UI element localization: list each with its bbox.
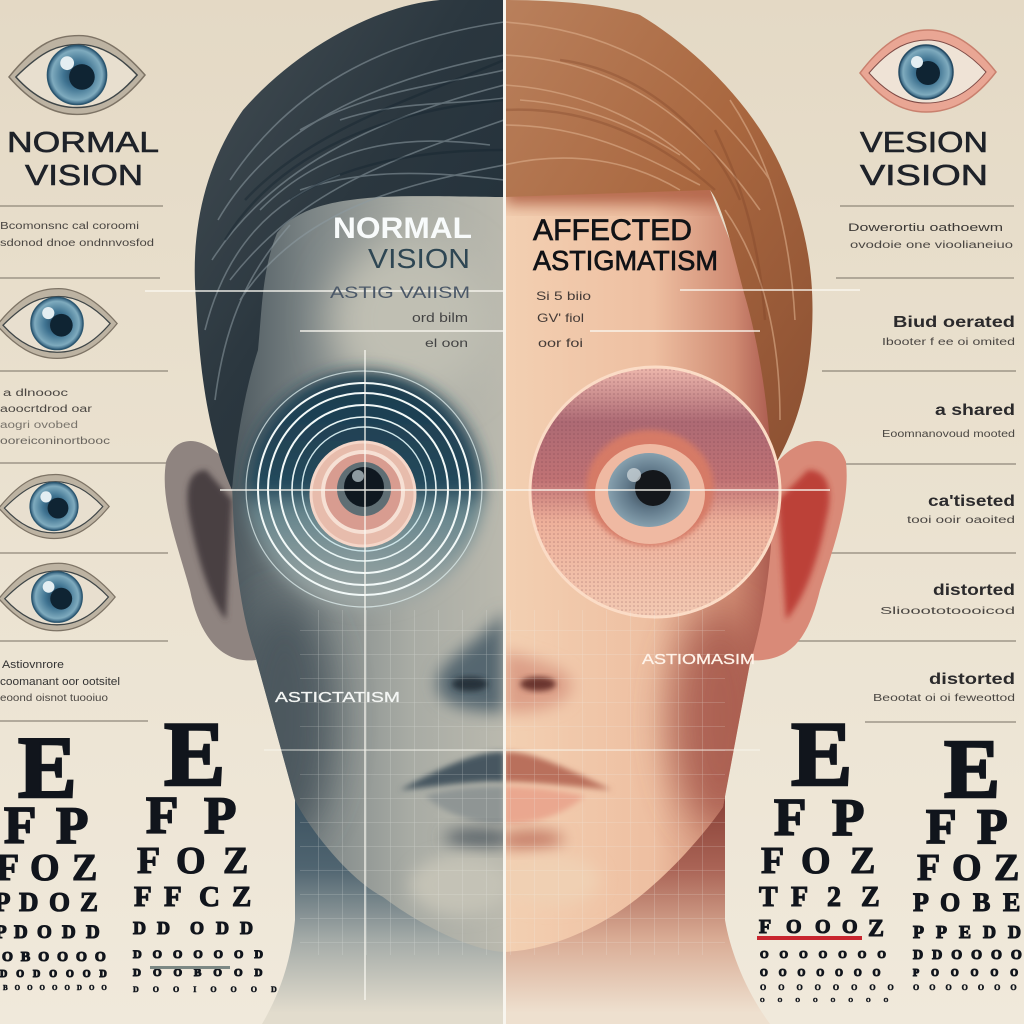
chart: eye chart 2: D (216, 918, 229, 938)
left forehead light (330, 240, 490, 400)
heading: normal vision left: NORMAL (7, 127, 159, 159)
icon: eye 3 (0, 474, 109, 538)
chart: eye chart 3: P (832, 789, 864, 847)
right vision disc (530, 367, 780, 617)
panel: right column affected (790, 30, 1016, 722)
chart: eye chart 4: E (944, 723, 1000, 816)
text block: blurred oerated: Ibooter f ee oi omited (882, 337, 1015, 348)
chart: eye chart 2: E (164, 703, 225, 805)
chart: eye chart 1: D (86, 922, 100, 943)
chart: eye chart 1: P (56, 797, 88, 855)
left lips (400, 752, 516, 915)
chart: eye chart 3: OOOOOOO (760, 968, 891, 979)
right hair (504, 0, 813, 470)
divider and text block 1: Bcomonsnc cal coroomi (0, 221, 139, 232)
text block: blurred oerated (822, 314, 1016, 371)
chart: eye chart 3: F (761, 840, 784, 882)
heading: normal vision center (333, 212, 472, 274)
text block: a shared (815, 402, 1016, 464)
chart: eye chart 2: DOOIOOOD (133, 985, 291, 994)
text block 2: a dlnoooc (3, 388, 68, 399)
right face shape (506, 190, 772, 952)
chart: eye chart 1: DODOOOD (0, 969, 116, 980)
text block: center affected: oor foi (538, 336, 583, 350)
chart: eye chart 1: O (30, 847, 60, 889)
heading: affected astigmatism (533, 214, 718, 276)
text block: distorted 1 (790, 582, 1016, 641)
overlay: scan lines (145, 290, 860, 1000)
text block: distorted 1: distorted (933, 582, 1015, 599)
chart: eye chart 4: Z (994, 847, 1019, 889)
text block: blurred oerated: Biud oerated (893, 314, 1015, 331)
divider and text block 1: sdonod dnoe ondnnvosfod (0, 238, 154, 249)
text block: right 1: ovodoie one vioolianeiuo (850, 240, 1014, 251)
text block 2 (0, 371, 168, 463)
chart: eye chart 4: O (940, 888, 960, 917)
highlight: red line (757, 936, 862, 940)
text block 3: coomanant oor ootsitel (0, 676, 120, 688)
label: astigmatism right: ASTIOMASIM (642, 651, 755, 668)
chart: eye chart 2: F (164, 881, 182, 913)
text block: center astigmatism left: ASTIG VAIISM (330, 283, 470, 302)
text block: cat tiseted: tooi ooir oaoited (907, 515, 1015, 526)
right eye iris (608, 453, 690, 527)
text block: distorted 2: distorted (929, 671, 1015, 688)
text block: center astigmatism left (330, 283, 470, 350)
text block: distorted 2: Beootat oi oi feweottod (873, 693, 1015, 704)
text block: distorted 1: Sliooototoooicod (880, 606, 1015, 617)
chart: eye chart 2: DOOBOOD (133, 967, 274, 979)
chart: eye chart 3: Z (868, 916, 884, 942)
chart: eye chart 2: C (199, 881, 220, 913)
chart: eye chart 2: DOOOOOD (133, 947, 274, 961)
chart: eye chart 2 (133, 703, 291, 994)
chart: eye chart 1: F (4, 797, 36, 855)
chart: eye chart 1: Z (80, 887, 98, 917)
text block: center astigmatism left: ord bilm (412, 310, 468, 325)
chart: eye chart 2: F (137, 840, 160, 882)
chart: left vision rings (246, 371, 482, 607)
text block: center affected: Si 5 biio (536, 289, 591, 303)
text block: center affected: GV' fiol (537, 311, 584, 325)
right forehead shadow (504, 180, 734, 204)
chart: eye chart 3: O (801, 840, 831, 882)
left nose shadow (437, 610, 504, 712)
chart: eye chart 2: D (240, 918, 253, 938)
chart: eye chart 1: Z (72, 847, 97, 889)
chart: eye chart 1: O (37, 922, 52, 943)
chart: eye chart 2: D (157, 918, 170, 938)
panel: left column normal vision (0, 36, 168, 721)
chart: eye chart 4: O (952, 847, 982, 889)
text block: right 1: Dowerortiu oathoewm (848, 222, 1003, 234)
chart: eye chart 3: 2 (827, 882, 841, 913)
chart: eye chart 2: Z (232, 881, 251, 913)
chart: eye chart 1: E (18, 720, 77, 817)
chart: eye chart 4: F (917, 847, 940, 889)
chart: eye chart 3: Z (850, 840, 875, 882)
heading: affected astigmatism: ASTIGMATISM (533, 245, 718, 276)
left neck (262, 780, 504, 1024)
chart: eye chart 3: OOOOOOOO (760, 983, 906, 992)
chart: eye chart 2: Z (223, 840, 248, 882)
chart: eye chart 3: OOOOOOOO (760, 998, 901, 1004)
icon: top left eye (9, 36, 145, 114)
text block: right 1 (836, 206, 1014, 278)
text block 3: eoond oisnot tuooiuo (0, 693, 109, 704)
chart: eye chart 4 (913, 723, 1024, 992)
chart: eye chart 4: P (977, 798, 1008, 854)
icon: eye 4 (0, 563, 115, 631)
chart: eye chart 3 (759, 703, 906, 1004)
chart: eye chart 1 (0, 720, 116, 992)
chart: eye chart 2: F (146, 787, 178, 845)
chart: eye chart 3: O (815, 916, 831, 938)
chart: eye chart 4: P (913, 888, 929, 917)
panel: right half of face (496, 0, 847, 1024)
heading: vision right (860, 127, 988, 192)
chart: eye chart 1: O (49, 887, 70, 917)
heading: normal vision left (7, 127, 159, 192)
left cheek shade (235, 600, 335, 840)
right lips (506, 748, 610, 894)
heading: vision right: VISION (860, 160, 988, 192)
chart: eye chart 2: D (133, 918, 146, 938)
text block 2: aoocrtdrod oar (0, 404, 93, 415)
chart: eye chart 3: O (842, 916, 858, 938)
label: astictatism left: ASTICTATISM (275, 689, 400, 706)
right neck (504, 780, 770, 1024)
chart: eye chart 1: OBOOOO (2, 950, 114, 965)
chart: eye chart 3: T (759, 882, 778, 913)
overlay: lower face grid (300, 610, 725, 955)
right ear (745, 441, 847, 660)
icon: eye 2 (0, 289, 117, 358)
chart: eye chart 1: D (14, 922, 28, 943)
text block 2: ooreiconinortbooc (0, 436, 110, 447)
heading: normal vision left: VISION (25, 160, 143, 192)
divider and text block 1 (0, 206, 163, 278)
chart: eye chart 2: F (134, 881, 152, 913)
right nose shadow (504, 650, 572, 712)
chart: eye chart 3: OOOOOOO (760, 949, 897, 961)
left eye dark band (247, 371, 483, 607)
chart: eye chart 1: D (19, 887, 38, 917)
text block: center astigmatism left: el oon (425, 336, 468, 350)
chart: eye chart 2: O (176, 840, 206, 882)
text block: cat tiseted: ca'tiseted (928, 493, 1015, 510)
text block 2: aogri ovobed (0, 420, 78, 431)
left eye pink rings (311, 442, 415, 546)
chart: eye chart 3: F (791, 882, 808, 913)
chart: eye chart 3: Z (861, 882, 880, 913)
heading: affected astigmatism: AFFECTED (533, 214, 692, 247)
chart: eye chart 4: E (1003, 888, 1020, 917)
right cheek blush (670, 610, 770, 830)
left ear (165, 441, 256, 660)
text block: a shared: Eoomnanovoud mooted (882, 429, 1015, 440)
icon: top right eye pink (860, 30, 996, 112)
divider (0, 552, 168, 554)
chart: eye chart 1: D (62, 922, 76, 943)
panel: left half of face (165, 0, 516, 1024)
left face shape (232, 196, 503, 952)
heading: normal vision center: NORMAL (333, 212, 472, 245)
eye surround (586, 430, 714, 546)
text block 3 (0, 641, 168, 721)
text block: a shared: a shared (935, 402, 1015, 419)
text block 3: Astiovnrore (2, 659, 64, 671)
text block: center affected (536, 289, 591, 350)
chart: eye chart 3: F (759, 916, 771, 938)
heading: vision right: VESION (860, 127, 988, 159)
chart: eye chart 2: O (190, 918, 204, 938)
chart: eye chart 3: E (791, 703, 852, 805)
chart: eye chart 2: P (204, 787, 236, 845)
chart: eye chart 4: B (973, 888, 990, 917)
chart: eye chart 4: F (926, 798, 957, 854)
heading: normal vision center: VISION (368, 243, 470, 274)
left hair (195, 0, 504, 490)
text block: distorted 2 (865, 671, 1016, 722)
chart smear left (150, 966, 230, 969)
chart: eye chart 3: O (786, 916, 802, 938)
chart: eye chart 1: BOOOOODOO (3, 984, 114, 992)
text block: cat tiseted (815, 493, 1016, 553)
chart: eye chart 3: F (774, 789, 806, 847)
center divider (503, 0, 506, 1024)
